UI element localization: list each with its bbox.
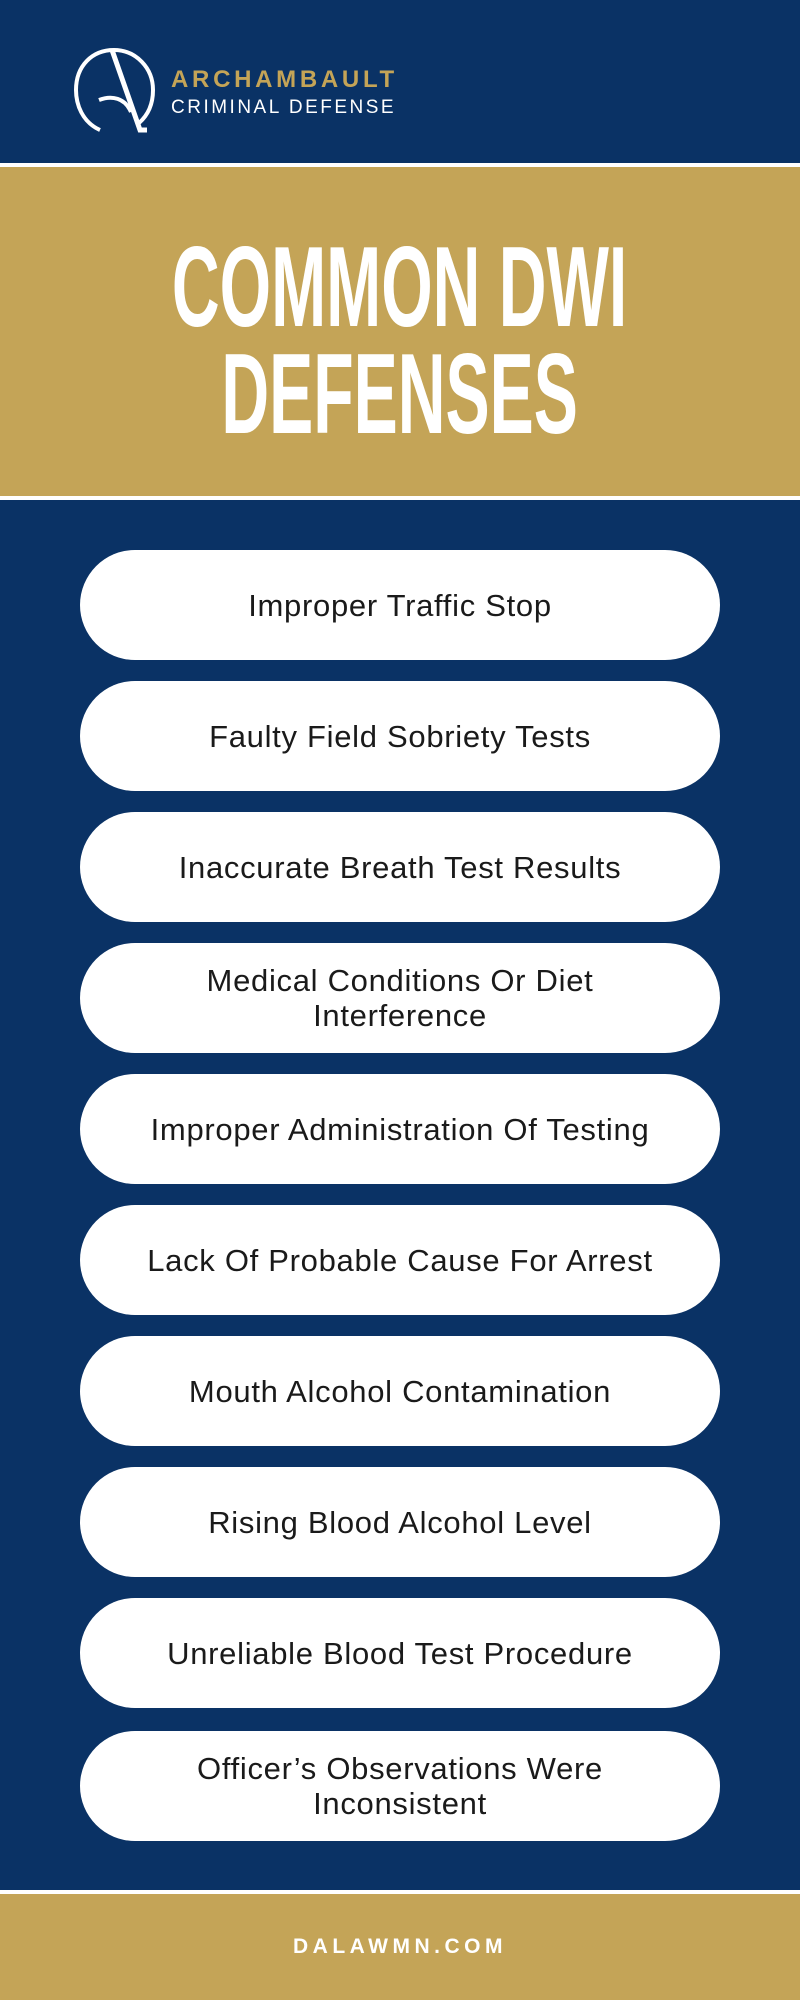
item 2: Faulty Field Sobriety Tests [209,718,591,754]
item 4: Interference [313,998,487,1033]
item 3 [80,812,720,922]
list of defenses [80,550,720,1841]
title band [0,167,800,496]
logo text [171,66,398,118]
item 4 [80,943,720,1053]
item 10 [80,1731,720,1841]
item 6 [80,1205,720,1315]
item 3: Inaccurate Breath Test Results [179,850,621,884]
item 5: Improper Administration Of Testing [151,1112,649,1146]
item 6: Lack Of Probable Cause For Arrest [147,1242,653,1278]
item 1: Improper Traffic Stop [248,588,552,622]
header band [0,0,800,163]
item 5 [80,1074,720,1184]
logo text: CRIMINAL DEFENSE [171,97,396,118]
item 10: Inconsistent [313,1786,487,1821]
item 7 [80,1336,720,1446]
title [172,224,628,458]
item 7: Mouth Alcohol Contamination [189,1374,611,1408]
item 2 [80,681,720,791]
footer [0,1894,800,2000]
item 8 [80,1467,720,1577]
item 10: Officer’s Observations Were [197,1751,603,1786]
item 9: Unreliable Blood Test Procedure [167,1636,633,1670]
footer: DALAWMN.COM [293,1935,507,1958]
icon: logo mark [74,48,155,132]
item 4: Medical Conditions Or Diet [207,963,593,998]
item 9 [80,1598,720,1708]
title: COMMON DWI [172,224,628,351]
logo text: ARCHAMBAULT [171,66,398,93]
title: DEFENSES [222,331,578,458]
item 1 [80,550,720,660]
item 8: Rising Blood Alcohol Level [208,1504,592,1540]
